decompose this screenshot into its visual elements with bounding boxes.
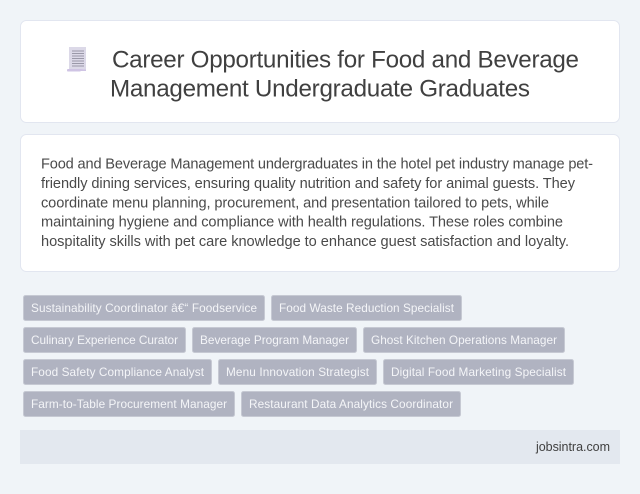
tag: Farm-to-Table Procurement Manager (31, 397, 227, 411)
description text: hospitality skills with pet care knowledge to enhance guest satisfaction and loyalty. (41, 234, 569, 250)
tag: Culinary Experience Curator (31, 333, 178, 347)
panel: header (20, 20, 620, 122)
description text: friendly dining services, ensuring quality nutrition and safety for animal guests. They (41, 176, 576, 192)
tag: Menu Innovation Strategist (226, 365, 370, 379)
tag (242, 392, 460, 416)
title (110, 46, 579, 102)
tag (272, 296, 462, 320)
description text (41, 156, 593, 250)
tag (192, 328, 356, 352)
tag (218, 360, 376, 384)
tag: Beverage Program Manager (200, 333, 349, 347)
tag (24, 392, 234, 416)
tag: Sustainability Coordinator â€“ Foodservice (31, 301, 257, 315)
tag: Restaurant Data Analytics Coordinator (249, 397, 453, 411)
title: Management Undergraduate Graduates (110, 76, 530, 102)
footer: jobsintra.com (535, 440, 610, 454)
tag (24, 360, 212, 384)
description text: maintaining hygiene and compliance with health regulations. These roles combine (41, 214, 563, 230)
title: Career Opportunities for Food and Beverage (112, 46, 579, 74)
icon: menu document (67, 47, 86, 72)
tag: Ghost Kitchen Operations Manager (371, 333, 557, 347)
tag (384, 360, 574, 384)
description text: coordinate menu planning, procurement, and presentation tailored to pets, while (41, 196, 549, 212)
panel: description (20, 134, 620, 272)
tag: Digital Food Marketing Specialist (391, 365, 567, 379)
tag (24, 328, 186, 352)
footer (20, 430, 620, 464)
description text: Food and Beverage Management undergraduates in the hotel pet industry manage pet- (41, 156, 593, 172)
tag (364, 328, 564, 352)
tag (24, 296, 264, 320)
tag: Food Safety Compliance Analyst (31, 365, 205, 379)
tag list (24, 296, 574, 416)
tag: Food Waste Reduction Specialist (279, 301, 455, 315)
